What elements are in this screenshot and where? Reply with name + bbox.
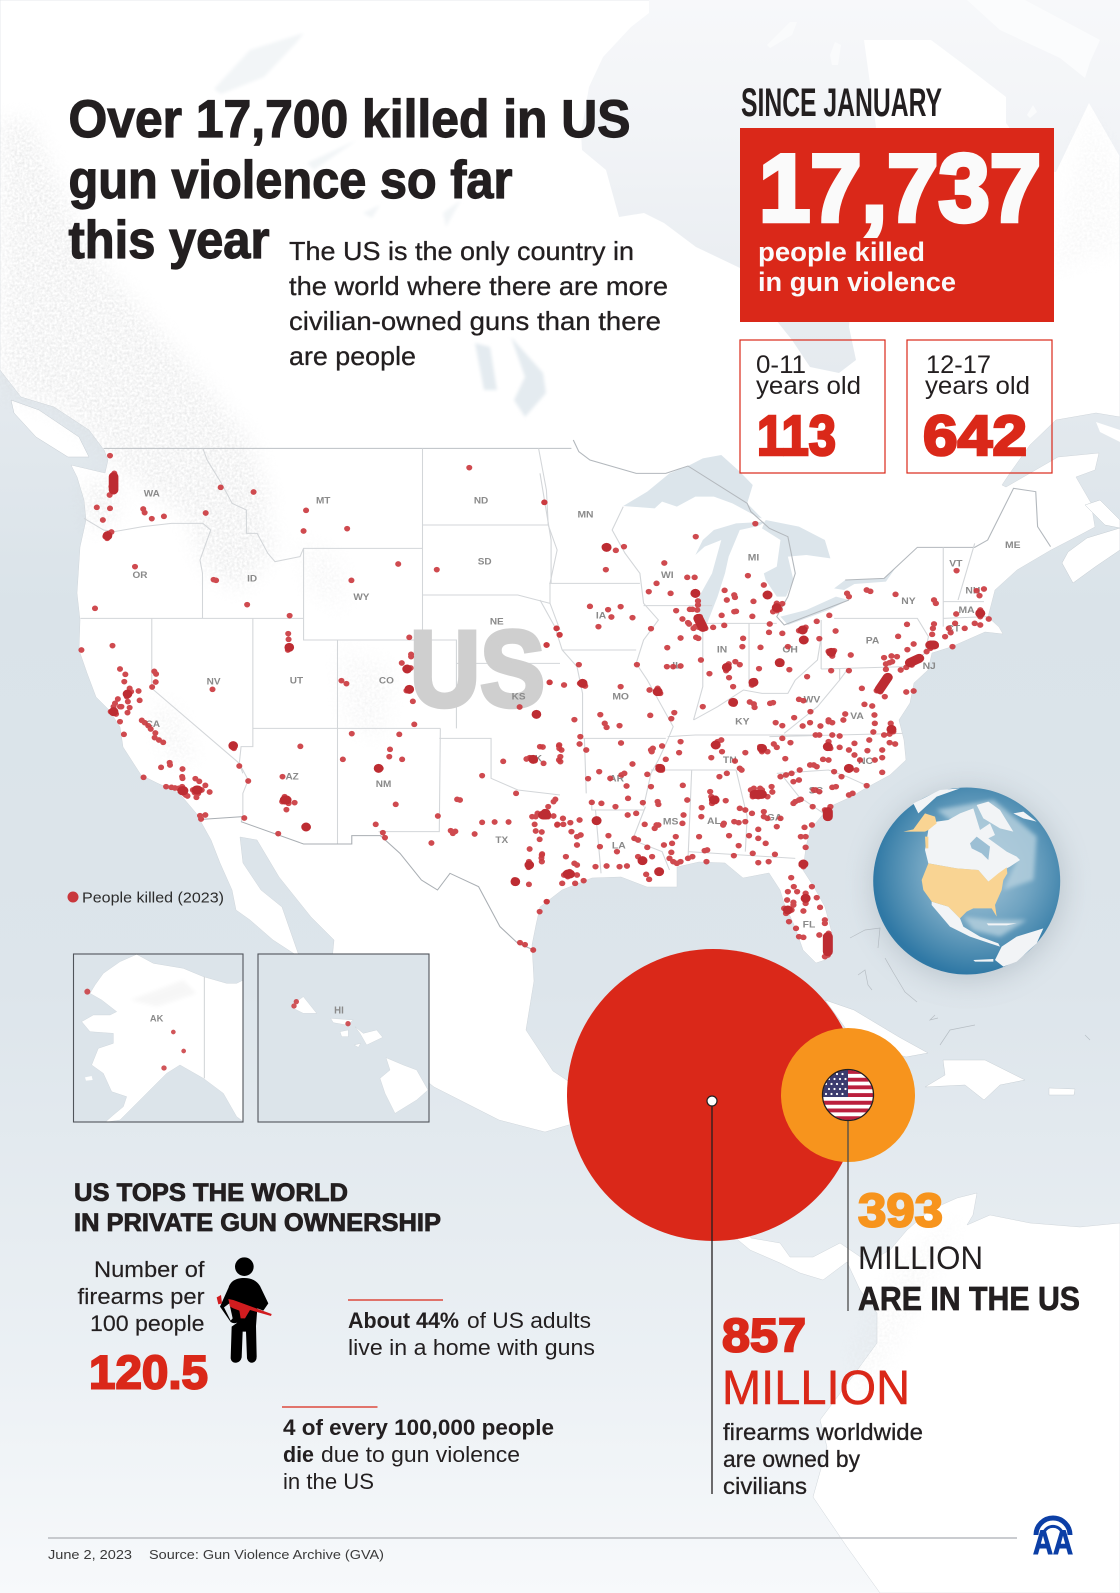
caption: people killed in gun violence: people killed [758,237,925,267]
state labels: NM [376,779,391,790]
state labels: FL [803,920,815,930]
state labels: WY [353,592,370,603]
panel: total killed [740,128,1054,322]
state labels: KY [735,717,750,728]
state labels: OH [782,645,798,656]
heading: since January: SINCE JANUARY [741,81,942,125]
heading: US tops the world [74,1179,441,1237]
number: 120.5: 120.5 [89,1346,208,1398]
globe [873,788,1063,980]
number: 17,737: 17,737 [759,135,1041,242]
stat: 857 million worldwide [722,1308,923,1499]
footer: date and source: Source: Gun Violence Archive (GVA) [149,1547,384,1562]
panel: 12-17 years old: 12-17 [926,351,991,379]
icon: US flag [822,1070,874,1120]
legend: people killed: People killed (2023) [82,890,224,906]
state labels: LA [612,841,626,852]
leader line: 857 million [707,1096,717,1494]
state labels: KS [512,692,526,703]
state labels: VT [949,559,962,569]
caption: people killed in gun violence [758,237,956,297]
state labels: AZ [285,772,299,783]
stat: 857 million worldwide: are owned by [723,1446,860,1472]
panel: 12-17 years old: 642 [923,404,1027,468]
large map label: US: US [410,608,545,729]
fact: 4 of every 100,000 people: 4 of every 100,000 people [283,1415,554,1440]
subtitle text [289,236,668,371]
heading: US tops the world: US TOPS THE WORLD [74,1179,348,1207]
state labels: MA [959,605,975,616]
title [68,90,630,270]
state labels: NC [858,756,873,767]
state labels: NV [207,677,221,688]
text: number of firearms per 100 people: firearms per [78,1284,204,1309]
state labels: UT [290,676,303,687]
subtitle text: are people [289,341,416,371]
panel: 0-11 years old [740,340,885,473]
inset map: Alaska [74,954,243,1122]
fact: 4 of every 100,000 people: die [283,1442,314,1467]
stat: 857 million worldwide: civilians [723,1473,807,1499]
fact: 4 of every 100,000 people [282,1407,554,1494]
text: number of firearms per 100 people: Number of [94,1257,205,1282]
panel: 0-11 years old: 0-11 [756,351,806,379]
state labels: GA [767,813,782,823]
state labels: NH [965,586,980,597]
inset map: Hawaii [258,954,429,1122]
state labels: PA [866,636,879,647]
state labels: NE [490,617,504,627]
circle: US firearms [781,1028,915,1162]
lakes in Canada and Great Lakes [214,33,895,625]
stat: 393 million in the US: ARE IN THE US [858,1280,1080,1317]
state labels: CA [146,719,160,730]
state labels: VA [850,711,864,722]
state labels: MO [612,692,629,703]
leader line: 393 million [847,1120,849,1311]
fact: 4 of every 100,000 people: due to gun violence [321,1442,520,1467]
inset map: Alaska: AK [150,1014,164,1024]
state labels: ND [474,496,488,507]
state labels: CO [379,676,394,687]
state labels: IA [596,611,606,621]
state labels: IN [717,645,727,656]
footer: date and source [48,1538,1017,1562]
title: Over 17,700 killed in US [68,90,630,149]
state labels: WV [804,695,821,705]
footer: date and source: June 2, 2023 [48,1547,132,1562]
title: gun violence so far [68,151,512,210]
icon: person holding rifle [217,1257,272,1363]
state labels: OR [133,570,148,581]
inset map: Hawaii: HI [334,1006,344,1017]
heading: US tops the world: IN PRIVATE GUN OWNERSHIP [74,1209,441,1237]
state labels: TX [495,835,509,846]
panel: 12-17 years old: years old [925,372,1030,400]
dots: people killed, western US [81,456,560,950]
state labels: NY [901,596,916,607]
caption: people killed in gun violence: in gun violence [758,267,956,297]
state labels: AR [609,774,624,784]
state labels: WI [661,570,674,581]
fact: 44% of US adults: live in a home with guns [348,1335,595,1360]
fact: 4 of every 100,000 people: in the US [283,1469,374,1494]
state labels [133,489,1021,930]
stat: 393 million in the US [858,1184,1080,1317]
state labels: TN [723,755,737,766]
US state and national borders [80,440,1051,950]
state labels: AL [707,816,721,827]
icon: Anadolu Agency logo: AA [1033,1524,1073,1562]
fact: 44% of US adults: About 44% [348,1308,459,1333]
stat: 393 million in the US: MILLION [858,1240,983,1276]
state labels: NJ [923,661,936,672]
circle: worldwide firearms [567,949,859,1241]
state labels: ME [1005,540,1021,551]
dots: people killed, eastern US [540,502,989,957]
state labels: MI [748,553,759,563]
state labels: SD [478,557,492,568]
subtitle text: the world where there are more [289,271,668,301]
state labels: OK [527,754,542,764]
title: this year [68,211,270,270]
state labels: MN [577,510,594,521]
stat: 857 million worldwide: firearms worldwide [723,1419,923,1445]
state labels: MT [316,496,331,507]
state labels: IL [672,661,681,672]
subtitle text: civilian-owned guns than there [289,306,661,336]
state labels: MS [663,817,679,828]
panel: 12-17 years old [907,340,1052,473]
stat: 857 million worldwide: MILLION [722,1362,910,1415]
state labels: WA [144,489,160,499]
fact: 44% of US adults: of US adults [467,1308,591,1333]
text: number of firearms per 100 people: 100 people [90,1311,204,1336]
fact: 44% of US adults [348,1300,595,1360]
stat: 393 million in the US: 393 [858,1184,943,1236]
stat: 857 million worldwide: 857 [722,1308,806,1362]
panel: 0-11 years old: years old [756,372,861,400]
state labels: CT [946,624,960,635]
panel: 0-11 years old: 113 [757,404,836,468]
text: number of firearms per 100 people [78,1257,205,1336]
state labels: ID [247,574,257,584]
subtitle text: The US is the only country in [289,236,634,266]
state labels: SC [809,786,823,797]
